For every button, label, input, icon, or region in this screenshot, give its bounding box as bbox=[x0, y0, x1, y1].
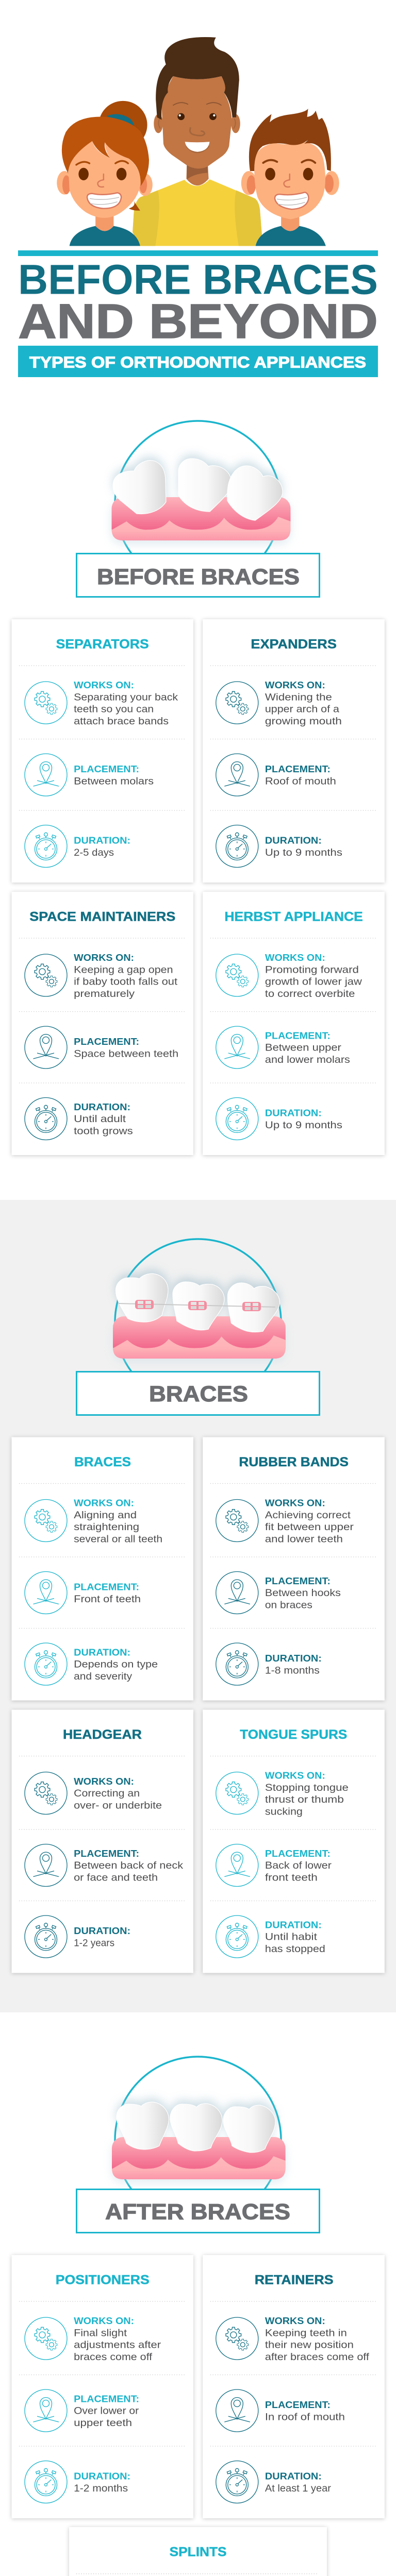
text: placement: Between hooks bbox=[265, 1587, 341, 1599]
text: duration bbox=[74, 1101, 133, 1137]
text: works on: Aligning and bbox=[74, 1510, 137, 1521]
row: placement bbox=[25, 1844, 183, 1887]
text: duration: has stopped bbox=[265, 1943, 325, 1955]
text: placement bbox=[265, 764, 336, 787]
text: placement: and lower molars bbox=[265, 1054, 350, 1065]
text: duration: 1-2 months bbox=[74, 2483, 128, 2494]
text: works on: Achieving correct bbox=[265, 1510, 351, 1521]
text: placement: Between upper bbox=[265, 1042, 341, 1054]
text: works on: Widening the bbox=[265, 691, 332, 703]
subtitle banner: TYPES OF ORTHODONTIC APPLIANCES bbox=[29, 353, 366, 371]
text: placement bbox=[74, 1848, 183, 1884]
text: duration: 1-2 years bbox=[74, 1937, 114, 1948]
row: works on bbox=[25, 2315, 161, 2363]
text: works on bbox=[74, 1776, 162, 1811]
text: works on: WORKS ON: bbox=[74, 680, 134, 690]
text: duration: DURATION: bbox=[265, 1653, 322, 1664]
row: duration bbox=[216, 2461, 331, 2503]
text: placement: In roof of mouth bbox=[265, 2411, 345, 2422]
icon: gears bbox=[25, 2317, 67, 2360]
card title: space maintainers: SPACE MAINTAINERS bbox=[29, 910, 175, 924]
text: duration: Until habit bbox=[265, 1931, 318, 1943]
title line: before braces: BEFORE BRACES bbox=[18, 257, 378, 303]
text: duration bbox=[74, 835, 130, 858]
text: duration: 1-8 months bbox=[265, 1665, 320, 1676]
text: works on: if baby tooth falls out bbox=[74, 976, 178, 988]
text: duration: 2-5 days bbox=[74, 847, 114, 858]
text: duration: DURATION: bbox=[265, 1919, 322, 1930]
text: works on: sucking bbox=[265, 1806, 303, 1817]
row: works on bbox=[216, 1497, 354, 1545]
title line: and beyond: AND BEYOND bbox=[18, 294, 378, 349]
text: placement: PLACEMENT: bbox=[74, 1036, 139, 1047]
card: headgear bbox=[11, 1709, 193, 1973]
card: positioners bbox=[11, 2255, 193, 2518]
card: separators bbox=[11, 619, 193, 883]
text: works on: Stopping tongue bbox=[265, 1782, 349, 1793]
text: placement: Front of teeth bbox=[74, 1594, 141, 1605]
row: works on bbox=[216, 1770, 349, 1817]
icon: map pin bbox=[25, 1026, 67, 1069]
row: works on bbox=[216, 2315, 370, 2363]
card: herbst appliance bbox=[203, 892, 385, 1155]
icon: stopwatch bbox=[216, 1643, 258, 1685]
text: duration bbox=[265, 2471, 331, 2494]
text: placement: PLACEMENT: bbox=[74, 1582, 139, 1592]
row: duration bbox=[25, 825, 130, 868]
text: works on: Correcting an bbox=[74, 1788, 140, 1799]
row: placement bbox=[216, 754, 336, 796]
person: boy with brown hair and braces bbox=[241, 109, 339, 246]
text: duration: DURATION: bbox=[74, 1647, 130, 1657]
card: space maintainers bbox=[11, 892, 193, 1155]
card title: expanders: EXPANDERS bbox=[251, 637, 337, 652]
text: placement: on braces bbox=[265, 1599, 312, 1611]
text: duration bbox=[74, 1925, 130, 1948]
text: duration: At least 1 year bbox=[265, 2483, 331, 2494]
text: works on: fit between upper bbox=[265, 1521, 354, 1533]
text: placement: Space between teeth bbox=[74, 1048, 178, 1059]
row: placement bbox=[216, 2389, 345, 2432]
row: duration bbox=[216, 1097, 342, 1140]
icon: stopwatch bbox=[25, 1097, 67, 1140]
row: works on bbox=[25, 1772, 162, 1815]
icon: stopwatch bbox=[25, 1643, 67, 1685]
row: placement bbox=[216, 1571, 341, 1614]
panel: braces section background bbox=[0, 1200, 396, 2012]
text: works on: growth of lower jaw bbox=[265, 976, 362, 988]
text: placement bbox=[74, 1582, 141, 1605]
text: placement bbox=[74, 2393, 139, 2429]
text: works on: growing mouth bbox=[265, 716, 342, 727]
text: placement: Between molars bbox=[74, 775, 154, 787]
card: retainers bbox=[203, 2255, 385, 2518]
text: works on: and lower teeth bbox=[265, 1533, 343, 1545]
text: works on: WORKS ON: bbox=[265, 2315, 325, 2326]
text: placement: front teeth bbox=[265, 1872, 318, 1884]
text: works on: WORKS ON: bbox=[74, 952, 134, 963]
row: duration bbox=[25, 1643, 158, 1685]
text: placement bbox=[265, 1575, 341, 1611]
section heading: braces: BRACES bbox=[149, 1382, 248, 1406]
icon: stopwatch bbox=[216, 1097, 258, 1140]
text: duration: Depends on type bbox=[74, 1659, 158, 1670]
card title: tongue spurs: TONGUE SPURS bbox=[240, 1727, 347, 1742]
text: placement bbox=[265, 1030, 350, 1065]
icon: gears bbox=[216, 1499, 258, 1541]
text: placement: PLACEMENT: bbox=[265, 764, 331, 774]
icon: gears bbox=[25, 682, 67, 724]
section illustration: before braces crooked teeth bbox=[111, 421, 291, 587]
text: works on: WORKS ON: bbox=[265, 1497, 325, 1509]
text: works on: after braces come off bbox=[265, 2351, 370, 2363]
text: works on: Keeping teeth in bbox=[265, 2327, 347, 2338]
card title: separators: SEPARATORS bbox=[56, 637, 149, 652]
row: placement bbox=[25, 1026, 178, 1069]
text: duration: DURATION: bbox=[265, 2471, 322, 2481]
card: tongue spurs bbox=[203, 1709, 385, 1973]
text: works on: Separating your back bbox=[74, 691, 178, 703]
text: duration: DURATION: bbox=[74, 2471, 130, 2481]
card title: splints: SPLINTS bbox=[170, 2545, 227, 2560]
text: works on: WORKS ON: bbox=[74, 1497, 134, 1509]
card: expanders bbox=[203, 619, 385, 883]
text: placement bbox=[265, 2399, 345, 2422]
text: duration: DURATION: bbox=[265, 835, 322, 846]
text: works on: upper arch of a bbox=[265, 704, 339, 715]
text: duration bbox=[265, 835, 342, 858]
row: duration bbox=[216, 825, 342, 868]
card title: herbst appliance: HERBST APPLIANCE bbox=[224, 910, 363, 924]
text: works on: thrust or thumb bbox=[265, 1794, 344, 1805]
icon: gears bbox=[25, 1772, 67, 1815]
icon: map pin bbox=[216, 1844, 258, 1887]
text: placement bbox=[265, 1848, 332, 1884]
icon: gears bbox=[216, 954, 258, 996]
icon: gears bbox=[25, 1499, 67, 1541]
card title: retainers: RETAINERS bbox=[255, 2273, 334, 2287]
text: placement bbox=[74, 1036, 178, 1059]
row: works on bbox=[216, 680, 342, 727]
text: works on bbox=[265, 1770, 349, 1817]
icon: map pin bbox=[25, 1844, 67, 1887]
card: splints bbox=[69, 2527, 327, 2576]
text: duration: and severity bbox=[74, 1671, 132, 1682]
text: works on: over- or underbite bbox=[74, 1800, 162, 1811]
text: works on: Final slight bbox=[74, 2327, 127, 2338]
text: works on bbox=[265, 1497, 354, 1545]
text: works on: to correct overbite bbox=[265, 988, 355, 999]
text: works on: Promoting forward bbox=[265, 964, 359, 975]
card: braces bbox=[11, 1437, 193, 1700]
subtitle banner bbox=[18, 346, 378, 377]
row: placement bbox=[216, 1844, 332, 1887]
text: duration: DURATION: bbox=[74, 835, 130, 846]
text: placement bbox=[74, 764, 154, 787]
text: duration bbox=[265, 1919, 325, 1955]
person: man in yellow shirt bbox=[133, 37, 262, 246]
text: works on: teeth so you can bbox=[74, 704, 154, 715]
text: works on bbox=[265, 952, 362, 999]
text: duration: Up to 9 months bbox=[265, 847, 342, 858]
hero illustration: three smiling people bbox=[57, 37, 339, 246]
section heading: before braces bbox=[76, 553, 320, 597]
text: works on: WORKS ON: bbox=[74, 2315, 134, 2326]
icon: map pin bbox=[25, 2389, 67, 2432]
icon: gears bbox=[216, 1772, 258, 1815]
section heading: after braces: AFTER BRACES bbox=[105, 2200, 290, 2225]
icon: stopwatch bbox=[216, 825, 258, 868]
text: works on: WORKS ON: bbox=[74, 1776, 134, 1787]
title block bbox=[18, 250, 378, 377]
text: works on bbox=[74, 1497, 162, 1545]
row: placement bbox=[25, 754, 154, 796]
section illustration: straight teeth after braces bbox=[112, 2057, 286, 2223]
text: works on: several or all teeth bbox=[74, 1533, 162, 1545]
section illustration: teeth with braces bbox=[113, 1239, 286, 1405]
text: works on: attach brace bands bbox=[74, 716, 169, 727]
icon: gears bbox=[25, 954, 67, 996]
text: works on: prematurely bbox=[74, 988, 135, 999]
icon: map pin bbox=[216, 2389, 258, 2432]
text: duration bbox=[74, 2471, 130, 2494]
row: duration bbox=[25, 2461, 130, 2503]
row: duration bbox=[216, 1643, 322, 1685]
text: works on: braces come off bbox=[74, 2351, 153, 2363]
text: duration: Up to 9 months bbox=[265, 1120, 342, 1131]
row: placement bbox=[25, 2389, 139, 2432]
text: works on: adjustments after bbox=[74, 2340, 161, 2351]
card title: positioners: POSITIONERS bbox=[56, 2273, 150, 2287]
icon: map pin bbox=[216, 1571, 258, 1614]
card title: braces: BRACES bbox=[74, 1455, 131, 1469]
icon: map pin bbox=[25, 754, 67, 796]
text: works on: WORKS ON: bbox=[265, 1770, 325, 1781]
text: works on bbox=[74, 952, 178, 999]
icon: gears bbox=[216, 2317, 258, 2360]
text: duration: Until adult bbox=[74, 1113, 126, 1125]
person: girl with red hair and braces bbox=[57, 101, 153, 246]
icon: map pin bbox=[25, 1571, 67, 1614]
icon: map pin bbox=[216, 1026, 258, 1069]
icon: gears bbox=[216, 682, 258, 724]
text: placement: Over lower or bbox=[74, 2405, 139, 2417]
section heading: after braces bbox=[76, 2190, 320, 2233]
card title: rubber bands: RUBBER BANDS bbox=[239, 1455, 349, 1469]
row: placement bbox=[216, 1026, 350, 1069]
text: duration bbox=[265, 1108, 342, 1131]
text: placement: PLACEMENT: bbox=[265, 2399, 331, 2410]
text: works on bbox=[265, 2315, 370, 2363]
row: duration bbox=[216, 1916, 325, 1958]
row: works on bbox=[25, 680, 178, 727]
text: duration: tooth grows bbox=[74, 1125, 133, 1137]
text: placement: Between back of neck bbox=[74, 1860, 183, 1871]
section heading: before braces: BEFORE BRACES bbox=[97, 565, 300, 589]
text: duration: DURATION: bbox=[74, 1101, 130, 1112]
row: works on bbox=[25, 952, 178, 999]
text: works on bbox=[74, 2315, 161, 2363]
text: placement: PLACEMENT: bbox=[74, 1848, 139, 1859]
text: duration: DURATION: bbox=[74, 1925, 130, 1936]
text: works on bbox=[74, 680, 178, 727]
card title: headgear: HEADGEAR bbox=[63, 1727, 142, 1742]
text: duration bbox=[74, 1647, 158, 1682]
icon: stopwatch bbox=[216, 2461, 258, 2503]
icon: stopwatch bbox=[25, 825, 67, 868]
text: duration: DURATION: bbox=[265, 1108, 322, 1118]
icon: stopwatch bbox=[216, 1916, 258, 1958]
row: works on bbox=[216, 952, 362, 999]
text: placement: or face and teeth bbox=[74, 1872, 158, 1884]
row: duration bbox=[25, 1916, 130, 1958]
card: rubber bands bbox=[203, 1437, 385, 1700]
text: works on: WORKS ON: bbox=[265, 952, 325, 963]
text: placement: PLACEMENT: bbox=[265, 1575, 331, 1586]
text: placement: Back of lower bbox=[265, 1860, 332, 1871]
text: placement: PLACEMENT: bbox=[74, 2393, 139, 2404]
row: works on bbox=[25, 1497, 162, 1545]
text: works on: Keeping a gap open bbox=[74, 964, 173, 975]
text: duration bbox=[265, 1653, 322, 1676]
text: works on: WORKS ON: bbox=[265, 680, 325, 690]
icon: stopwatch bbox=[25, 1916, 67, 1958]
text: placement: upper teeth bbox=[74, 2417, 132, 2429]
text: works on: straightening bbox=[74, 1521, 139, 1533]
text: placement: PLACEMENT: bbox=[265, 1030, 331, 1041]
braces wire and brackets bbox=[119, 1300, 275, 1311]
section heading: braces bbox=[76, 1371, 320, 1415]
text: placement: PLACEMENT: bbox=[74, 764, 139, 774]
text: placement: PLACEMENT: bbox=[265, 1848, 331, 1859]
text: works on: their new position bbox=[265, 2340, 354, 2351]
icon: stopwatch bbox=[25, 2461, 67, 2503]
icon: map pin bbox=[216, 754, 258, 796]
row: placement bbox=[25, 1571, 141, 1614]
text: placement: Roof of mouth bbox=[265, 775, 336, 787]
text: works on bbox=[265, 680, 342, 727]
row: duration bbox=[25, 1097, 133, 1140]
